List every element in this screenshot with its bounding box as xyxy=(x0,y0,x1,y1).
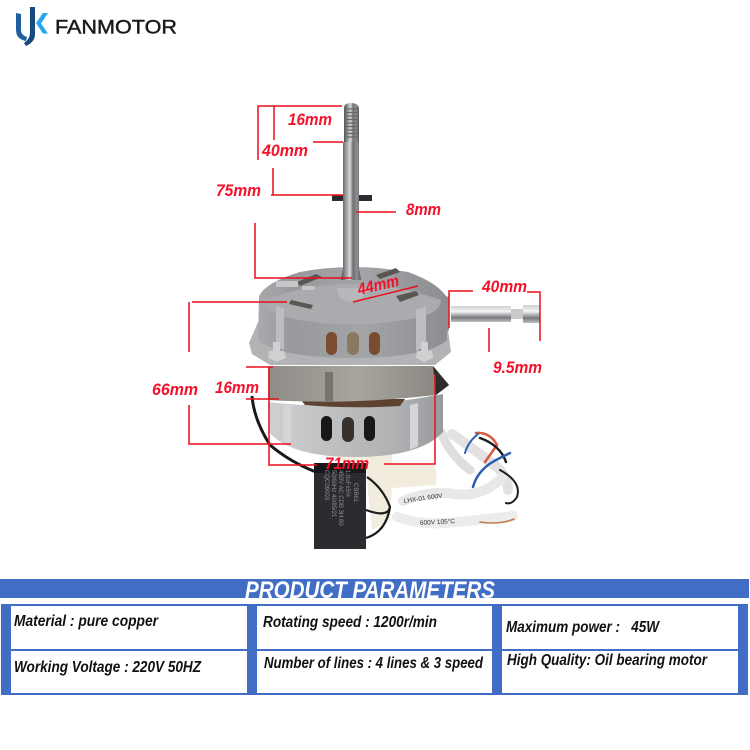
top housing dome xyxy=(258,267,447,358)
cell: working voltage: Working Voltage : 220V 50HZ xyxy=(14,659,201,676)
lower housing xyxy=(268,394,443,457)
label: 9.5mm: 9.5mm xyxy=(493,359,542,377)
stator core xyxy=(268,366,449,402)
label: 16mm stator: 16mm xyxy=(215,379,259,397)
capacitor: 450V AC CDB 3H 80 xyxy=(337,470,343,526)
motor photo illustration xyxy=(249,103,540,549)
icon: YK mark xyxy=(16,7,48,46)
cell: maximum power xyxy=(502,606,738,649)
cell: high quality xyxy=(502,651,738,693)
top housing rim xyxy=(249,322,451,365)
cell: working voltage xyxy=(11,651,247,693)
copper windings xyxy=(300,399,405,407)
bolts xyxy=(268,342,433,362)
cell: high quality: High Quality: Oil bearing motor xyxy=(507,652,708,669)
cell: maximum power: Maximum power : 45W xyxy=(506,619,660,636)
capacitor: CBB61 xyxy=(352,483,358,503)
top housing vents xyxy=(276,268,419,309)
heading band: product parameters: PRODUCT PARAMETERS xyxy=(245,577,495,604)
black wires xyxy=(252,396,316,472)
horizontal shaft xyxy=(441,295,540,334)
label: 66mm: 66mm xyxy=(152,381,198,399)
wire print xyxy=(403,493,455,527)
cell: material xyxy=(11,606,247,649)
label: 8mm: 8mm xyxy=(406,201,441,219)
plastic connector xyxy=(317,450,437,530)
upper vent slots xyxy=(326,332,380,355)
brand name: FANMOTOR xyxy=(55,16,177,38)
wire print: 600V 105°C xyxy=(420,517,455,527)
capacitor: 50/60Hz 40/85/21 xyxy=(330,470,336,518)
wire print: LHX-01 600V xyxy=(403,493,444,505)
capacitor xyxy=(314,463,366,549)
label: 75mm: 75mm xyxy=(216,182,261,200)
cell: number of lines xyxy=(257,651,492,693)
dimension labels xyxy=(152,111,542,473)
dimension lines xyxy=(188,106,540,465)
cell: rotating speed: Rotating speed : 1200r/min xyxy=(263,614,437,631)
label: 40mm output shaft: 40mm xyxy=(481,278,527,296)
white lead wires xyxy=(397,432,518,523)
heading band: product parameters xyxy=(0,577,749,604)
lower vent slots xyxy=(321,416,375,442)
label: 16mm thread: 16mm xyxy=(288,111,332,129)
cell: number of lines: Number of lines : 4 lines & 3 speed xyxy=(264,655,483,672)
logo: YK FANMOTOR xyxy=(16,7,177,46)
parameter table xyxy=(1,604,748,695)
label: 44mm: 44mm xyxy=(355,272,401,299)
capacitor: 1.0uF±5% xyxy=(344,470,350,498)
cell: rotating speed xyxy=(257,606,492,649)
cell: material: Material : pure copper xyxy=(14,613,159,630)
label: 40mm shaft: 40mm xyxy=(261,142,308,160)
label: 71mm: 71mm xyxy=(325,455,369,473)
capacitor: CQC09003 xyxy=(323,470,329,501)
vertical shaft xyxy=(332,103,372,280)
